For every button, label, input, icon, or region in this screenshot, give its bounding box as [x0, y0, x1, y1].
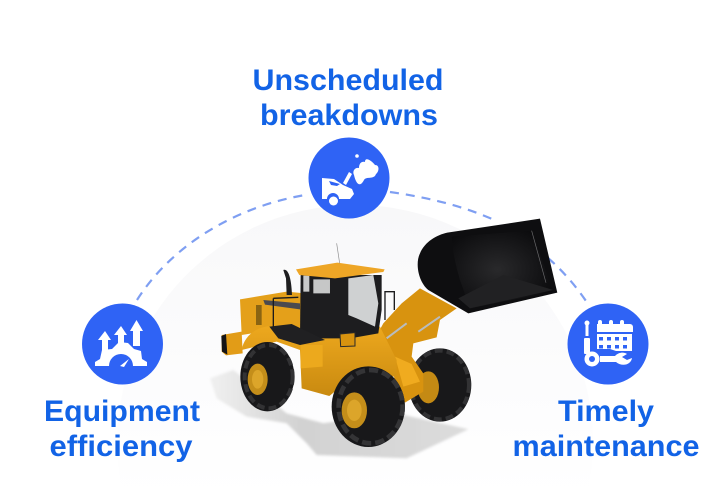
steps panel — [301, 345, 323, 368]
chassis body — [242, 326, 397, 396]
label: Equipment efficiency — [44, 395, 200, 463]
background glow — [117, 205, 593, 496]
title: Unscheduled breakdowns: Unscheduled — [252, 64, 444, 97]
label: Equipment efficiency: Equipment — [44, 395, 200, 428]
rear bumper — [222, 332, 243, 355]
ground shadow — [210, 370, 468, 458]
headlight — [340, 333, 355, 347]
front wheel — [332, 366, 405, 447]
label: Timely maintenance — [512, 395, 700, 463]
wheel loader — [210, 219, 557, 458]
cab — [296, 243, 385, 338]
label: Equipment efficiency: efficiency — [50, 430, 193, 463]
icon: car breakdown — [308, 138, 390, 218]
engine hood — [240, 292, 307, 335]
exhaust stack — [283, 270, 292, 295]
front far wheel — [409, 348, 471, 422]
icon: efficiency gauge and arrows — [82, 304, 163, 384]
label: Timely maintenance: Timely — [558, 395, 654, 428]
rear wheel — [240, 342, 294, 411]
title: Unscheduled breakdowns: breakdowns — [260, 99, 438, 132]
icon: calendar and tools — [568, 304, 648, 384]
bucket — [418, 219, 557, 313]
boom arm — [367, 288, 457, 403]
dashed arc — [137, 192, 586, 301]
platform — [269, 324, 325, 345]
title: Unscheduled breakdowns — [252, 64, 444, 132]
label: Timely maintenance: maintenance — [512, 430, 700, 463]
